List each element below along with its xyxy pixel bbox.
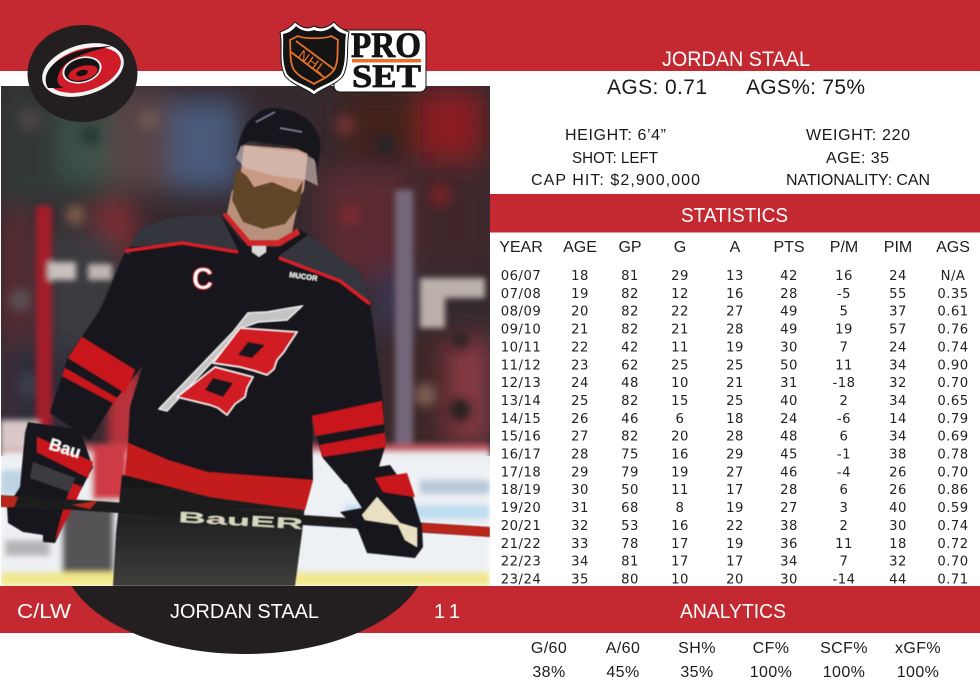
- row 07/08: 55: [889, 287, 907, 302]
- row 17/18: -4: [837, 465, 851, 480]
- row 06/07: 81: [621, 269, 639, 284]
- row 10/11: 42: [621, 340, 639, 355]
- row 20/21: 2: [840, 519, 848, 534]
- row 20/21: 30: [889, 519, 907, 534]
- row 19/20: 27: [780, 501, 798, 516]
- row 19/20: 19/20: [501, 501, 541, 516]
- analytics heading bar: [490, 586, 980, 633]
- row 22/23: 7: [840, 555, 848, 570]
- top red banner: [0, 0, 980, 71]
- jersey sponsor text: MUCOR: [289, 270, 319, 283]
- row 16/17: 16/17: [501, 448, 541, 462]
- row 13/14: 25: [726, 394, 744, 409]
- row 17/18: 79: [621, 465, 639, 480]
- row 22/23: 17: [671, 555, 689, 570]
- player figure: [0, 108, 490, 586]
- row 08/09: 22: [671, 305, 689, 320]
- row 10/11: 24: [889, 340, 907, 355]
- position label: C/LW: [17, 601, 71, 623]
- row 06/07: 13: [726, 269, 744, 284]
- row 06/07: 29: [671, 269, 689, 284]
- row 12/13: -18: [832, 376, 856, 391]
- row 10/11: 10/11: [501, 340, 541, 355]
- row 23/24: 35: [571, 572, 589, 588]
- row 22/23: 17: [726, 555, 744, 570]
- analytics values: 35%: [680, 664, 714, 681]
- player name: JORDAN STAAL: [170, 601, 319, 623]
- row 21/22: 21/22: [501, 537, 541, 552]
- row 08/09: 37: [889, 305, 907, 320]
- row 16/17: 75: [621, 448, 639, 462]
- row 17/18: 26: [889, 465, 907, 480]
- row 12/13: 12/13: [501, 376, 541, 391]
- row 08/09: 49: [780, 305, 798, 320]
- row 15/16: 15/16: [501, 430, 541, 445]
- row 14/15: 14: [889, 412, 907, 427]
- bio right column: WEIGHT: 220: [806, 127, 910, 144]
- row 14/15: 24: [780, 412, 798, 427]
- row 16/17: 45: [780, 448, 798, 462]
- row 09/10: 09/10: [501, 323, 541, 338]
- row 11/12: 50: [780, 358, 798, 373]
- row 18/19: 18/19: [501, 483, 541, 498]
- row 21/22: 0.72: [937, 537, 969, 552]
- left glove: [7, 422, 93, 543]
- row 19/20: 40: [889, 501, 907, 516]
- row 14/15: 14/15: [501, 412, 541, 427]
- row 22/23: 22/23: [501, 555, 541, 570]
- table header: AGS: [936, 239, 970, 256]
- row 13/14: 2: [840, 394, 848, 409]
- analytics labels: CF%: [753, 640, 789, 657]
- row 19/20: 3: [840, 501, 848, 516]
- stick: [0, 495, 490, 537]
- row 21/22: 33: [571, 537, 589, 552]
- row 10/11: 30: [780, 340, 798, 355]
- row 22/23: 34: [780, 555, 798, 570]
- row 15/16: 0.69: [937, 430, 969, 445]
- jersey number: 11: [434, 601, 460, 623]
- table header: A: [730, 239, 741, 256]
- row 23/24: -14: [832, 572, 856, 588]
- row 23/24: 80: [621, 572, 639, 588]
- row 09/10: 49: [780, 323, 798, 338]
- analytics values: 38%: [532, 664, 566, 681]
- row 12/13: 31: [780, 376, 798, 391]
- row 17/18: 27: [726, 465, 744, 480]
- face: [240, 144, 308, 196]
- row 18/19: 26: [889, 483, 907, 498]
- arena background crowd: [0, 86, 490, 456]
- row 13/14: 82: [621, 394, 639, 409]
- shoulder yoke left: [130, 214, 238, 250]
- row 13/14: 13/14: [501, 394, 541, 409]
- row 08/09: 82: [621, 305, 639, 320]
- bio right column: AGE: 35: [826, 150, 889, 167]
- row 15/16: 28: [726, 430, 744, 445]
- row 22/23: 32: [889, 555, 907, 570]
- header player name: JORDAN STAAL: [662, 48, 810, 71]
- row 17/18: 46: [780, 465, 798, 480]
- row 22/23: 34: [571, 555, 589, 570]
- right glove: [340, 465, 423, 558]
- row 09/10: 21: [671, 323, 689, 338]
- row 20/21: 22: [726, 519, 744, 534]
- row 12/13: 0.70: [937, 376, 969, 391]
- analytics labels: A/60: [606, 640, 640, 657]
- row 17/18: 17/18: [501, 465, 541, 480]
- row 21/22: 19: [726, 537, 744, 552]
- row 18/19: 6: [840, 483, 848, 498]
- row 12/13: 10: [671, 376, 689, 391]
- row 10/11: 7: [840, 340, 848, 355]
- row 15/16: 27: [571, 430, 589, 445]
- row 22/23: 0.70: [937, 555, 969, 570]
- row 07/08: -5: [837, 287, 851, 302]
- row 18/19: 17: [726, 483, 744, 498]
- row 19/20: 31: [571, 501, 589, 516]
- analytics values: 100%: [897, 664, 939, 681]
- row 18/19: 30: [571, 483, 589, 498]
- row 08/09: 20: [571, 305, 589, 320]
- row 15/16: 82: [621, 430, 639, 445]
- row 17/18: 29: [571, 465, 589, 480]
- row 21/22: 11: [835, 537, 853, 552]
- analytics heading: ANALYTICS: [680, 601, 786, 623]
- analytics labels: SH%: [678, 640, 716, 657]
- row 07/08: 16: [726, 287, 744, 302]
- player arm right: [308, 304, 386, 485]
- row 06/07: 16: [835, 269, 853, 284]
- AGS value: AGS: 0.71: [607, 76, 707, 99]
- analytics labels: xGF%: [895, 640, 941, 657]
- row 10/11: 22: [571, 340, 589, 355]
- bottom left red bar: [0, 586, 490, 633]
- bio left column: CAP HIT: $2,900,000: [531, 172, 700, 189]
- row 11/12: 0.90: [937, 358, 969, 373]
- row 16/17: 38: [889, 448, 907, 462]
- icon: hurricanes puck logo: [28, 25, 138, 122]
- row 07/08: 28: [780, 287, 798, 302]
- row 12/13: 21: [726, 376, 744, 391]
- row 19/20: 19: [726, 501, 744, 516]
- row 08/09: 5: [840, 305, 848, 320]
- analytics values: 100%: [750, 664, 792, 681]
- row 07/08: 82: [621, 287, 639, 302]
- left glove brand text: Bau: [47, 435, 83, 462]
- row 20/21: 38: [780, 519, 798, 534]
- row 06/07: N/A: [941, 269, 965, 284]
- analytics values: 45%: [606, 664, 640, 681]
- table header: P/M: [830, 239, 858, 256]
- row 18/19: 50: [621, 483, 639, 498]
- NHL crest: [252, 246, 266, 257]
- row 16/17: -1: [837, 448, 851, 462]
- boards and ice: [0, 420, 490, 586]
- row 08/09: 0.61: [937, 305, 969, 320]
- row 08/09: 27: [726, 305, 744, 320]
- sleeve stripes left: [62, 337, 135, 403]
- row 23/24: 10: [671, 572, 689, 588]
- row 09/10: 28: [726, 323, 744, 338]
- row 14/15: 26: [571, 412, 589, 427]
- neck: [227, 190, 300, 243]
- statistics heading: STATISTICS: [681, 205, 788, 227]
- row 20/21: 53: [621, 519, 639, 534]
- table header: PIM: [884, 239, 912, 256]
- beard: [232, 168, 303, 229]
- row 11/12: 11/12: [501, 358, 541, 373]
- jersey hem stripe: [125, 443, 313, 510]
- row 21/22: 18: [889, 537, 907, 552]
- row 14/15: 0.79: [937, 412, 969, 427]
- row 07/08: 19: [571, 287, 589, 302]
- row 19/20: 8: [676, 501, 684, 516]
- row 08/09: 08/09: [501, 305, 541, 320]
- row 09/10: 19: [835, 323, 853, 338]
- table header: GP: [618, 239, 642, 256]
- row 09/10: 21: [571, 323, 589, 338]
- row 10/11: 19: [726, 340, 744, 355]
- row 06/07: 42: [780, 269, 798, 284]
- row 10/11: 11: [671, 340, 689, 355]
- row 17/18: 0.70: [937, 465, 969, 480]
- row 22/23: 81: [621, 555, 639, 570]
- row 18/19: 28: [780, 483, 798, 498]
- row 15/16: 20: [671, 430, 689, 445]
- table header: G: [674, 239, 686, 256]
- row 11/12: 34: [889, 358, 907, 373]
- row 09/10: 57: [889, 323, 907, 338]
- hurricane flag logo: [159, 306, 302, 415]
- row 11/12: 25: [671, 358, 689, 373]
- row 16/17: 29: [726, 448, 744, 462]
- row 07/08: 12: [671, 287, 689, 302]
- row 23/24: 44: [889, 572, 907, 588]
- row 21/22: 17: [671, 537, 689, 552]
- row 19/20: 68: [621, 501, 639, 516]
- row 13/14: 15: [671, 394, 689, 409]
- row 13/14: 40: [780, 394, 798, 409]
- row 11/12: 11: [835, 358, 853, 373]
- row 06/07: 18: [571, 269, 589, 284]
- row 11/12: 23: [571, 358, 589, 373]
- row 09/10: 0.76: [937, 323, 969, 338]
- row 18/19: 11: [671, 483, 689, 498]
- table header: AGE: [563, 239, 597, 256]
- stick brand text: BauER: [178, 509, 304, 533]
- bio left column: SHOT: LEFT: [572, 150, 658, 167]
- row 21/22: 78: [621, 537, 639, 552]
- bio left column: HEIGHT: 6’4”: [565, 127, 666, 144]
- player photo: [0, 86, 490, 586]
- row 13/14: 25: [571, 394, 589, 409]
- statistics table: [499, 239, 970, 588]
- player arm left: [50, 252, 160, 440]
- row 09/10: 82: [621, 323, 639, 338]
- bio left column: [531, 127, 700, 189]
- row 14/15: 6: [676, 412, 684, 427]
- row 16/17: 16: [671, 448, 689, 462]
- row 11/12: 62: [621, 358, 639, 373]
- visor: [236, 146, 318, 186]
- row 23/24: 0.71: [937, 572, 969, 588]
- row 16/17: 28: [571, 448, 589, 462]
- row 20/21: 16: [671, 519, 689, 534]
- row 13/14: 0.65: [937, 394, 969, 409]
- table header: PTS: [773, 239, 805, 256]
- row 20/21: 0.74: [937, 519, 969, 534]
- row 07/08: 0.35: [937, 287, 969, 302]
- row 14/15: 46: [621, 412, 639, 427]
- NHL text: NHL: [295, 46, 329, 77]
- SET text: SET: [352, 59, 421, 95]
- icon: NHL Pro Set logo: [280, 22, 426, 95]
- row 20/21: 20/21: [501, 519, 541, 534]
- row 23/24: 20: [726, 572, 744, 588]
- analytics values: 100%: [823, 664, 865, 681]
- row 15/16: 6: [840, 430, 848, 445]
- helmet: [237, 108, 321, 168]
- jersey body: [124, 216, 340, 510]
- AGS percent value: AGS%: 75%: [746, 76, 865, 99]
- row 12/13: 24: [571, 376, 589, 391]
- row 16/17: 0.78: [937, 448, 969, 462]
- row 19/20: 0.59: [937, 501, 969, 516]
- PRO text: PRO: [351, 25, 421, 65]
- row 21/22: 36: [780, 537, 798, 552]
- pants: [113, 475, 306, 586]
- collar: [222, 213, 300, 246]
- bio right column: [786, 127, 930, 189]
- row 18/19: 0.86: [937, 483, 969, 498]
- sleeve stripes right: [312, 401, 386, 457]
- row 14/15: 18: [726, 412, 744, 427]
- row 15/16: 34: [889, 430, 907, 445]
- row 15/16: 48: [780, 430, 798, 445]
- row 06/07: 06/07: [501, 269, 541, 284]
- statistics heading bar: [490, 194, 980, 232]
- row 17/18: 19: [671, 465, 689, 480]
- row 10/11: 0.74: [937, 340, 969, 355]
- row 20/21: 32: [571, 519, 589, 534]
- table header: YEAR: [499, 239, 543, 256]
- shoulder yoke right: [278, 235, 370, 303]
- row 06/07: 24: [889, 269, 907, 284]
- row 23/24: 30: [780, 572, 798, 588]
- bio right column: NATIONALITY: CAN: [786, 172, 930, 189]
- analytics labels: G/60: [531, 640, 567, 657]
- analytics labels: SCF%: [820, 640, 868, 657]
- captain C: C: [192, 261, 213, 296]
- black name arc: [72, 586, 418, 654]
- row 07/08: 07/08: [501, 287, 541, 302]
- row 14/15: -6: [837, 412, 851, 427]
- row 13/14: 34: [889, 394, 907, 409]
- row 12/13: 48: [621, 376, 639, 391]
- row 23/24: 23/24: [501, 572, 541, 588]
- row 11/12: 25: [726, 358, 744, 373]
- row 12/13: 32: [889, 376, 907, 391]
